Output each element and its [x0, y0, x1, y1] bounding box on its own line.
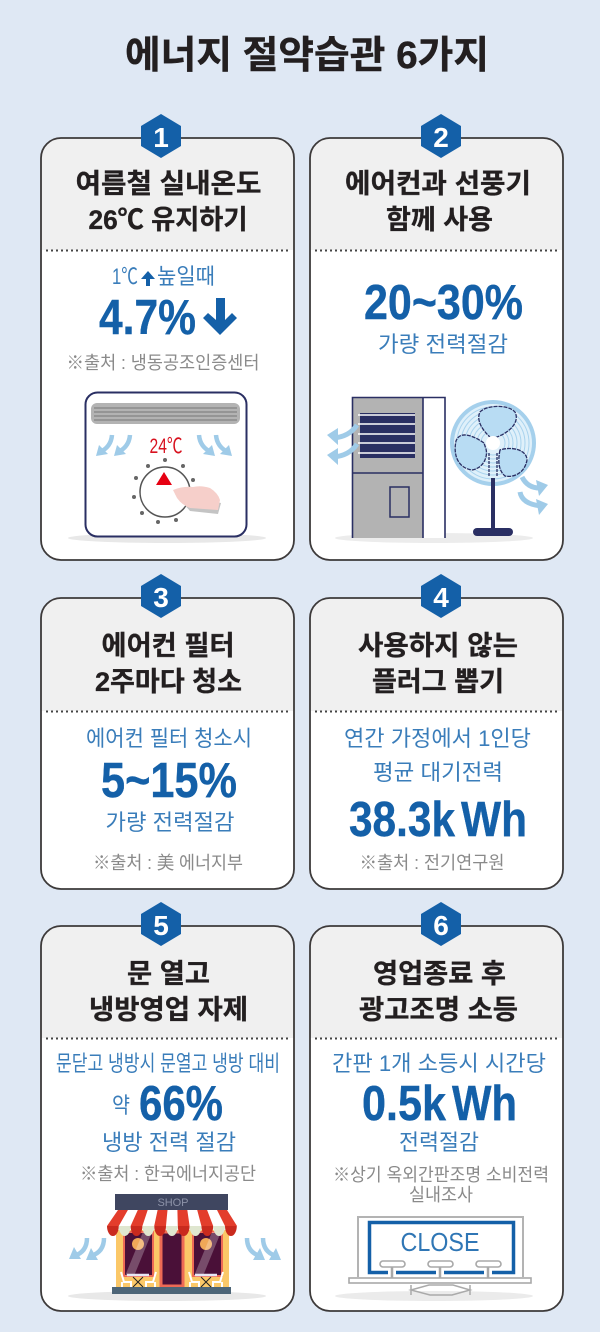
text: saving 2: 가량 전력절감 — [378, 332, 508, 357]
source 4: ※출처 : 전기연구원 — [360, 853, 504, 873]
text: standby: 평균 대기전력 — [373, 760, 503, 785]
text: filter: 에어컨 필터 청소시 — [86, 726, 252, 751]
badge 2: 2 — [433, 122, 449, 153]
text: standby — [344, 726, 531, 785]
panel: card 1 — [41, 114, 294, 560]
big number 5~15%: 5~15% — [101, 754, 237, 808]
heading 6: 광고조명 소등 — [359, 995, 518, 1025]
source 1: ※출처 : 냉동공조인증센터 — [66, 353, 260, 373]
source 6 — [333, 1165, 549, 1205]
panel: card 6 — [310, 902, 563, 1311]
illustration: shop: SHOP — [158, 1197, 188, 1209]
illustration: thermostat: 24℃ — [150, 435, 182, 458]
panel: card 4 — [310, 574, 563, 889]
heading 4: 플러그 뽑기 — [372, 667, 504, 697]
heading 3: 에어컨 필터 — [102, 631, 234, 661]
text: sign: 간판 1개 소등시 시간당 — [332, 1051, 546, 1076]
panel: card 5 — [41, 902, 294, 1311]
big number 66% — [112, 1077, 223, 1131]
text: saving 3: 가량 전력절감 — [106, 810, 234, 835]
big number 66%: 66% — [139, 1077, 223, 1131]
text: saving 5: 냉방 전력 절감 — [102, 1130, 236, 1155]
text: door: 문닫고 냉방시 문열고 냉방 대비 — [56, 1051, 280, 1076]
illustration: shop — [68, 1194, 281, 1301]
panel: card 2 — [310, 114, 563, 560]
heading 5 — [89, 959, 248, 1025]
heading 5: 냉방영업 자제 — [89, 995, 248, 1025]
badge 3: 3 — [153, 582, 169, 613]
heading 5: 문 열고 — [127, 959, 210, 989]
big number 4.7%: 4.7% — [99, 291, 196, 345]
heading 3: 2주마다 청소 — [95, 667, 242, 697]
heading 4: 사용하지 않는 — [358, 631, 518, 661]
big number 20~30%: 20~30% — [364, 276, 523, 330]
heading 2 — [345, 169, 531, 235]
badge 1 — [141, 114, 181, 158]
badge 2 — [421, 114, 461, 158]
source 3: ※출처 : 美 에너지부 — [93, 853, 243, 873]
badge 6 — [421, 902, 461, 946]
badge 5: 5 — [153, 910, 169, 941]
heading 1: 26℃ 유지하기 — [88, 205, 248, 235]
illustration: closed sign — [335, 1217, 533, 1301]
heading 1 — [76, 169, 262, 235]
big number 38.3kWh — [349, 793, 527, 847]
source 6: 실내조사 — [409, 1185, 473, 1205]
badge 5 — [141, 902, 181, 946]
heading 2: 함께 사용 — [386, 205, 493, 235]
heading 3 — [95, 631, 242, 697]
panel: card 3 — [41, 574, 294, 889]
big number 0.5kWh — [362, 1077, 517, 1131]
title: 에너지 절약습관 6가지 — [125, 35, 489, 77]
badge 4: 4 — [433, 582, 449, 613]
text: condition: 1℃ — [112, 264, 138, 289]
big number 38.3kWh: 38.3k — [349, 793, 456, 847]
heading 1: 여름철 실내온도 — [76, 169, 262, 199]
badge 6: 6 — [433, 910, 449, 941]
badge 4 — [421, 574, 461, 618]
text: condition: 높일때 — [157, 264, 215, 289]
text: condition — [112, 264, 215, 289]
big number 66%: 약 — [112, 1093, 130, 1118]
text: saving 6: 전력절감 — [399, 1130, 479, 1155]
illustration: closed sign: CLOSE — [400, 1227, 480, 1257]
big number 38.3kWh: Wh — [461, 793, 527, 847]
illustration: thermostat — [68, 392, 266, 543]
heading 6: 영업종료 후 — [373, 959, 506, 989]
text: standby: 연간 가정에서 1인당 — [344, 726, 531, 751]
badge 1: 1 — [153, 122, 169, 153]
heading 4 — [358, 631, 518, 697]
big number 0.5kWh: 0.5k — [362, 1077, 447, 1131]
illustration: air conditioner and fan — [327, 397, 548, 543]
badge 3 — [141, 574, 181, 618]
heading 2: 에어컨과 선풍기 — [345, 169, 531, 199]
big number 0.5kWh: Wh — [452, 1077, 517, 1131]
source 5: ※출처 : 한국에너지공단 — [80, 1164, 256, 1184]
source 6: ※상기 옥외간판조명 소비전력 — [333, 1165, 549, 1185]
heading 6 — [359, 959, 518, 1025]
